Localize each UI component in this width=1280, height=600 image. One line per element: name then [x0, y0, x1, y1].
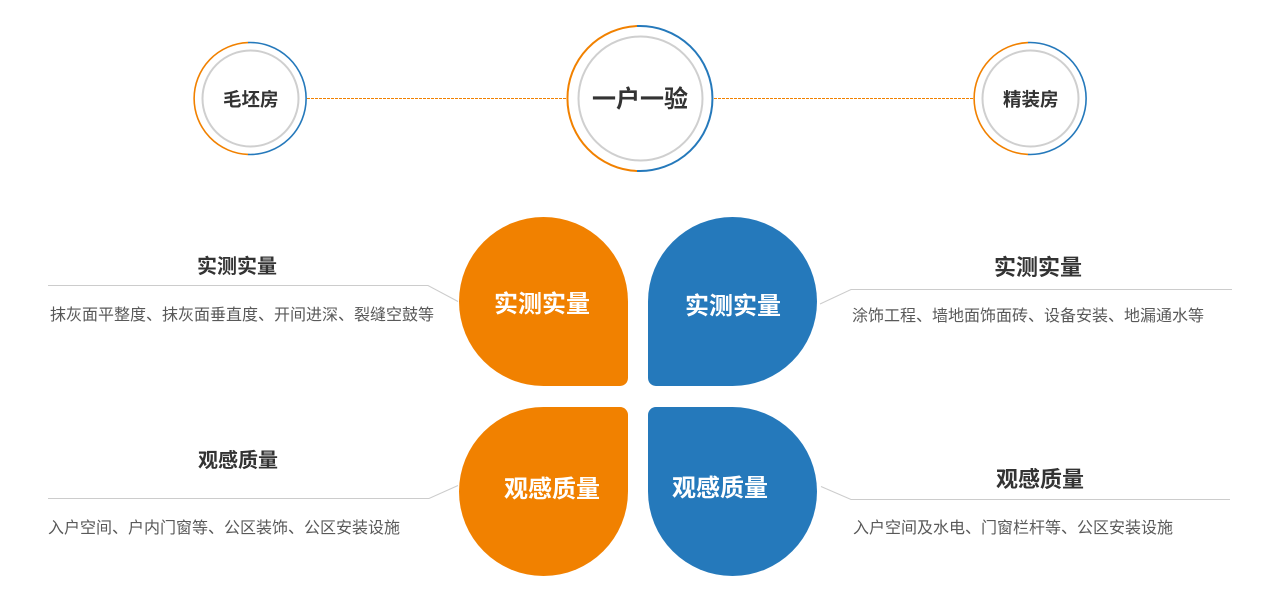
petal label: orange top: 实测实量 [494, 291, 590, 318]
ring: 一户一验 [567, 26, 712, 171]
leader line: bottom left [48, 486, 458, 498]
connector: left dashed line [307, 98, 567, 100]
ring: 毛坯房 [194, 43, 306, 154]
petal label: blue bottom: 观感质量 [672, 475, 768, 502]
petal: blue bottom right [648, 407, 817, 576]
text: bottom left: 入户空间、户内门窗等、公区装饰、公区安装设施 [48, 520, 400, 537]
leader line: top right [820, 290, 1232, 304]
petal: blue top right [648, 217, 817, 386]
label: 一户一验: 一户一验 [592, 86, 688, 113]
heading: top right: 实测实量 [994, 255, 1082, 280]
label: 精装房: 精装房 [1003, 89, 1059, 110]
petal label: orange bottom: 观感质量 [504, 476, 600, 503]
label: 毛坯房: 毛坯房 [223, 89, 279, 110]
heading: bottom left: 观感质量 [198, 450, 278, 472]
heading: bottom right: 观感质量 [996, 467, 1084, 492]
text: top left: 抹灰面平整度、抹灰面垂直度、开间进深、裂缝空鼓等 [50, 307, 434, 324]
ring: 精装房 [974, 43, 1086, 154]
petal: orange top left [459, 217, 628, 386]
leader line: bottom right [821, 486, 1230, 500]
text: bottom right: 入户空间及水电、门窗栏杆等、公区安装设施 [853, 520, 1173, 537]
petal: orange bottom left [459, 407, 628, 576]
leader line: top left [48, 286, 458, 302]
heading: top left: 实测实量 [197, 256, 277, 278]
text: top right: 涂饰工程、墙地面饰面砖、设备安装、地漏通水等 [852, 308, 1204, 325]
connector: right dashed line [714, 98, 973, 100]
petal label: blue top: 实测实量 [685, 293, 781, 320]
